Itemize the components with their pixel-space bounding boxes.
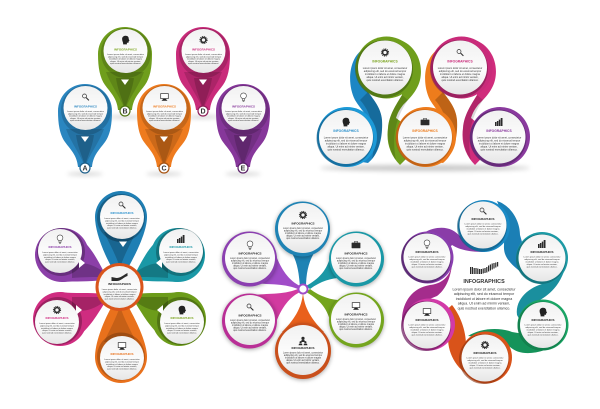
circle: pink: INFOGRAPHICS (447, 60, 473, 64)
circle: orange (396, 107, 456, 167)
pin C: Lorem ipsum dolor sit amet, consectetur (146, 110, 183, 113)
circle: orange: quis nostrud exercitation ullamco. (406, 148, 444, 152)
circle: lower right: adipiscing elit, sed do eiusmod tempor (337, 320, 375, 324)
circle: top: Lorem ipsum dolor sit amet, consectetur (465, 222, 502, 226)
circle: pink: quis nostrud exercitation ullamco. (42, 332, 72, 335)
circle: green (355, 36, 418, 98)
pin E: E (241, 166, 246, 173)
circle: upper left: incididunt ut labore et dolore magna (232, 262, 269, 265)
circle: purple: adipiscing elit, sed do eiusmod tempor (43, 253, 77, 256)
circle: lower left: INFOGRAPHICS (415, 318, 439, 322)
circle: upper right: quis nostrud exercitation ullamco. (527, 266, 558, 268)
circle: top: aliqua. Ut enim ad minim veniam, (468, 230, 499, 233)
circle: pink: incididunt ut labore et dolore magna (41, 327, 74, 330)
circle: lower right: Lorem ipsum dolor sit amet, consectetur (525, 324, 562, 326)
circle: teal: INFOGRAPHICS (169, 245, 193, 249)
circle: green: Lorem ipsum dolor sit amet, consectetur (164, 322, 200, 325)
stems (255, 250, 345, 332)
pin C (137, 84, 191, 174)
circle: lower right: INFOGRAPHICS (344, 312, 368, 316)
pin D: aliqua. Ut enim ad minim veniam, (188, 60, 219, 63)
pin A: quis nostrud exercitation ullamco. (70, 119, 101, 122)
circle: top: INFOGRAPHICS (471, 217, 495, 221)
circle: blue top: incididunt ut labore et dolore magna (106, 222, 139, 225)
circle: bottom: Lorem ipsum dolor sit amet, consectetur (467, 356, 504, 360)
circle: blue: aliqua. Ut enim ad minim veniam, (328, 146, 365, 148)
pin C: aliqua. Ut enim ad minim veniam, (149, 117, 180, 120)
circle: blue top (97, 194, 145, 247)
circle: upper right: aliqua. Ut enim ad minim veniam, (339, 264, 373, 268)
hub: quis nostrud exercitation ullamco. (105, 298, 135, 301)
circle: lower left: incididunt ut labore et dolore magna (232, 324, 269, 327)
pin A: A (82, 166, 88, 173)
pin A: Lorem ipsum dolor sit amet, consectetur (67, 110, 104, 113)
circle: top: adipiscing elit, sed do eiusmod tempor (465, 225, 501, 228)
pin E: adipiscing elit, sed do eiusmod tempor (226, 112, 261, 115)
pin D: adipiscing elit, sed do eiusmod tempor (186, 55, 221, 58)
circle: green: Lorem ipsum dolor sit amet, consectetur (363, 67, 407, 70)
circle: top: quis nostrud exercitation ullamco. (286, 237, 320, 240)
hub: incididunt ut labore et dolore magna (104, 293, 136, 296)
circle: blue top: quis nostrud exercitation ullamco. (107, 227, 137, 230)
center text: aliqua. Ut enim ad minim veniam, (458, 302, 510, 306)
pin B: aliqua. Ut enim ad minim veniam, (110, 60, 141, 63)
pin E: INFOGRAPHICS (232, 104, 255, 108)
circle: lower right: quis nostrud exercitation ullamco. (528, 334, 559, 336)
circle: purple: incididunt ut labore et dolore magna (44, 256, 77, 259)
circle: teal: quis nostrud exercitation ullamco. (166, 261, 196, 264)
pin E: incididunt ut labore et dolore magna (227, 115, 261, 118)
circle: orange bottom: aliqua. Ut enim ad minim veniam, (107, 365, 137, 368)
circle: blue (316, 107, 377, 167)
circle: teal: Lorem ipsum dolor sit amet, consectetur (163, 251, 199, 254)
circle: upper left: INFOGRAPHICS (415, 250, 439, 254)
circle: upper right: adipiscing elit, sed do eiusmod tempor (524, 258, 560, 261)
ground shadow (320, 165, 530, 171)
circle: purple: quis nostrud exercitation ullamco. (480, 148, 518, 152)
circle: upper left: INFOGRAPHICS (238, 252, 262, 256)
circle: pink: Lorem ipsum dolor sit amet, consectetur (39, 322, 75, 325)
circle: upper right: aliqua. Ut enim ad minim veniam, (527, 263, 558, 266)
pin B (98, 27, 152, 117)
circle: lower right: aliqua. Ut enim ad minim veniam, (528, 331, 559, 334)
circle: orange bottom: INFOGRAPHICS (110, 352, 134, 356)
circle: top: incididunt ut labore et dolore magna (466, 228, 500, 230)
circle: upper left: Lorem ipsum dolor sit amet, consectetur (409, 256, 446, 258)
circle: blue: adipiscing elit, sed do eiusmod tempor (325, 140, 367, 142)
circle: top (457, 200, 510, 252)
hub: adipiscing elit, sed do eiusmod tempor (102, 290, 137, 293)
circle: blue: INFOGRAPHICS (333, 129, 359, 133)
pin B: Lorem ipsum dolor sit amet, consectetur (107, 53, 144, 56)
circle: purple (470, 107, 530, 167)
circle: lower left: quis nostrud exercitation ullamco. (233, 329, 267, 332)
circle: lower right: incididunt ut labore et dolore magna (338, 323, 375, 326)
circle: lower left: INFOGRAPHICS (238, 314, 262, 318)
circle: upper left: aliqua. Ut enim ad minim veniam, (412, 263, 443, 266)
circle: bottom: quis nostrud exercitation ullamco. (286, 362, 320, 364)
hub: aliqua. Ut enim ad minim veniam, (105, 295, 135, 298)
circle: green: INFOGRAPHICS (372, 60, 398, 64)
circle: upper left (222, 232, 277, 286)
circle: bottom: adipiscing elit, sed do eiusmod tempor (467, 359, 503, 362)
circle: bottom: INFOGRAPHICS (473, 351, 497, 355)
circle: blue top: INFOGRAPHICS (110, 211, 134, 215)
circle: orange: incididunt ut labore et dolore magna (405, 142, 445, 146)
circle: bottom: quis nostrud exercitation ullamco. (470, 366, 501, 370)
circle: purple: Lorem ipsum dolor sit amet, consectetur (477, 136, 521, 140)
pin A: adipiscing elit, sed do eiusmod tempor (68, 112, 103, 115)
pin C: INFOGRAPHICS (153, 104, 176, 108)
panel: six-petal flower with hub (33, 191, 206, 383)
circle: lower right: aliqua. Ut enim ad minim veniam, (339, 326, 373, 328)
circle: lower left: aliqua. Ut enim ad minim veniam, (233, 326, 267, 330)
pin E (216, 84, 270, 174)
circle: lower left (222, 294, 277, 348)
circle: lower left: Lorem ipsum dolor sit amet, consectetur (409, 324, 446, 326)
circle: upper right: quis nostrud exercitation ullamco. (339, 267, 373, 270)
pin E: quis nostrud exercitation ullamco. (228, 119, 259, 122)
pin A: incididunt ut labore et dolore magna (69, 115, 103, 118)
hub node (298, 284, 308, 294)
circle: pink (430, 36, 492, 98)
center heading: INFOGRAPHICS (463, 279, 505, 285)
pin A: aliqua. Ut enim ad minim veniam, (70, 117, 101, 120)
pin A: INFOGRAPHICS (74, 104, 97, 108)
circle: bottom: INFOGRAPHICS (291, 346, 315, 350)
center text: quis nostrud exercitation ullamco. (458, 306, 510, 310)
ribbons (402, 201, 567, 378)
circle: green: incididunt ut labore et dolore magna (166, 327, 199, 330)
circle: upper left: adipiscing elit, sed do eiusmod tempor (409, 258, 445, 261)
circle: teal: incididunt ut labore et dolore magna (165, 256, 198, 259)
circle: top (275, 202, 330, 256)
circle: upper right: INFOGRAPHICS (344, 252, 368, 256)
petals (33, 191, 206, 383)
circle: blue top: Lorem ipsum dolor sit amet, consectetur (104, 217, 140, 220)
circle: upper left: aliqua. Ut enim ad minim veniam, (233, 264, 267, 268)
circle: lower left: Lorem ipsum dolor sit amet, consectetur (230, 319, 270, 322)
circle: green: quis nostrud exercitation ullamco. (167, 332, 197, 335)
circle: pink: incididunt ut labore et dolore magna (440, 73, 480, 76)
circle: bottom: adipiscing elit, sed do eiusmod tempor (284, 354, 322, 357)
pin C: adipiscing elit, sed do eiusmod tempor (147, 112, 182, 115)
circle: orange bottom: Lorem ipsum dolor sit amet, consectetur (104, 358, 140, 361)
ribbons (350, 40, 499, 165)
pin C: quis nostrud exercitation ullamco. (149, 119, 180, 122)
panel: six teardrops on thin stems (222, 202, 384, 379)
pin D: INFOGRAPHICS (192, 48, 215, 52)
pin D (176, 27, 230, 117)
pin B: B (122, 109, 128, 116)
circle: blue: incididunt ut labore et dolore magna (326, 142, 366, 146)
circle: teal: adipiscing elit, sed do eiusmod tempor (164, 253, 198, 256)
circle: green: adipiscing elit, sed do eiusmod tempor (364, 70, 406, 73)
circle: purple: quis nostrud exercitation ullamco. (45, 261, 75, 264)
center text: adipiscing elit, sed do eiusmod tempor (454, 292, 515, 296)
circle: orange: Lorem ipsum dolor sit amet, consectetur (403, 136, 447, 140)
circle: lower left: adipiscing elit, sed do eiusmod tempor (409, 326, 445, 329)
circle: pink (34, 297, 82, 345)
pin B: INFOGRAPHICS (114, 48, 137, 52)
circle: green (157, 297, 205, 345)
circle: top: adipiscing elit, sed do eiusmod tempor (284, 230, 322, 232)
circle: purple: Lorem ipsum dolor sit amet, consectetur (42, 251, 78, 254)
circle: blue: Lorem ipsum dolor sit amet, consectetur (324, 136, 368, 140)
circle: lower left: adipiscing elit, sed do eiusmod tempor (231, 322, 269, 324)
circle: green: INFOGRAPHICS (170, 316, 194, 320)
circle: orange: adipiscing elit, sed do eiusmod tempor (404, 140, 446, 142)
circle: pink: INFOGRAPHICS (45, 316, 69, 320)
pin C: incididunt ut labore et dolore magna (148, 115, 182, 118)
circle: green: aliqua. Ut enim ad minim veniam, (367, 76, 404, 79)
circle: bottom: Lorem ipsum dolor sit amet, consectetur (283, 352, 323, 354)
circle: purple: aliqua. Ut enim ad minim veniam, (45, 258, 75, 261)
circle: pink: adipiscing elit, sed do eiusmod tempor (40, 324, 74, 327)
circle: upper left: adipiscing elit, sed do eiusmod tempor (231, 260, 269, 262)
circle: lower right: INFOGRAPHICS (531, 318, 555, 322)
circle: orange: aliqua. Ut enim ad minim veniam, (407, 146, 444, 148)
circle: purple: INFOGRAPHICS (48, 245, 72, 249)
pin B: quis nostrud exercitation ullamco. (110, 62, 141, 65)
circle: lower right: incididunt ut labore et dolore magna (526, 328, 560, 332)
circle: green: incididunt ut labore et dolore magna (365, 73, 405, 76)
center text: Lorem ipsum dolor sit amet, consectetur (452, 288, 516, 292)
circle: blue: quis nostrud exercitation ullamco. (327, 148, 365, 152)
hub: Lorem ipsum dolor sit amet, consectetur (102, 288, 138, 291)
circle: blue top: adipiscing elit, sed do eiusmod tempor (105, 219, 139, 222)
circle: top: INFOGRAPHICS (291, 222, 315, 226)
circle: orange bottom: quis nostrud exercitation ullamco. (107, 368, 137, 371)
circle: top: aliqua. Ut enim ad minim veniam, (286, 234, 320, 238)
pin D: Lorem ipsum dolor sit amet, consectetur (185, 53, 222, 56)
circle: pink: quis nostrud exercitation ullamco. (441, 79, 479, 82)
circle: lower right: Lorem ipsum dolor sit amet, consectetur (336, 318, 376, 321)
circle: bottom: incididunt ut labore et dolore magna (285, 356, 322, 360)
circle: upper left: Lorem ipsum dolor sit amet, consectetur (230, 257, 270, 260)
pin E: Lorem ipsum dolor sit amet, consectetur (225, 110, 262, 113)
circle: teal (156, 228, 204, 276)
pin D: quis nostrud exercitation ullamco. (188, 62, 219, 65)
circle: upper left: quis nostrud exercitation ullamco. (412, 266, 443, 268)
circle: blue top: aliqua. Ut enim ad minim veniam, (107, 224, 137, 227)
circle: lower left (401, 298, 455, 351)
circle: top: incididunt ut labore et dolore magna (285, 232, 322, 235)
pin B: incididunt ut labore et dolore magna (109, 58, 143, 61)
pin D: incididunt ut labore et dolore magna (187, 58, 221, 61)
circle: bottom (275, 323, 331, 379)
circle: top: quis nostrud exercitation ullamco. (468, 232, 499, 236)
hub (96, 263, 144, 311)
circle: pink: aliqua. Ut enim ad minim veniam, (42, 329, 72, 332)
circle: bottom: aliqua. Ut enim ad minim veniam, (286, 359, 320, 362)
pin B: adipiscing elit, sed do eiusmod tempor (108, 55, 143, 58)
circle: purple: aliqua. Ut enim ad minim veniam, (481, 146, 518, 148)
circle: upper right: Lorem ipsum dolor sit amet, consectetur (524, 256, 561, 258)
icon: rising chart (112, 273, 128, 281)
circle: purple: incididunt ut labore et dolore magna (479, 142, 519, 146)
circle: bottom: incididunt ut labore et dolore magna (468, 362, 502, 364)
pin C: C (161, 166, 167, 173)
circle: pink: adipiscing elit, sed do eiusmod tempor (439, 70, 481, 73)
circle: green: adipiscing elit, sed do eiusmod tempor (165, 324, 199, 327)
circle: purple: INFOGRAPHICS (486, 129, 512, 133)
circle: upper left: quis nostrud exercitation ullamco. (233, 267, 267, 270)
pin A (58, 84, 112, 174)
panel: ribbon ring with central text (401, 200, 568, 384)
circle: lower right (518, 300, 568, 350)
circle: upper right (329, 232, 384, 286)
circle: pink: Lorem ipsum dolor sit amet, consectetur (438, 67, 482, 70)
circle: orange: INFOGRAPHICS (412, 129, 438, 133)
circle: purple (37, 228, 85, 276)
circle: upper right: Lorem ipsum dolor sit amet, consectetur (336, 257, 376, 260)
circle: bottom (459, 332, 512, 384)
circle: pink: aliqua. Ut enim ad minim veniam, (442, 76, 479, 79)
circle: orange bottom: adipiscing elit, sed do eiusmod tempor (105, 360, 139, 363)
circle: lower left: quis nostrud exercitation ullamco. (412, 334, 443, 336)
ground shadows (67, 116, 261, 176)
circle: green: aliqua. Ut enim ad minim veniam, (167, 329, 197, 332)
circle: teal: aliqua. Ut enim ad minim veniam, (166, 258, 196, 261)
hub: INFOGRAPHICS (108, 282, 131, 286)
circle: orange bottom (97, 332, 145, 380)
panel: linked S-curve circles (316, 36, 530, 171)
circle: top: Lorem ipsum dolor sit amet, consectetur (283, 227, 323, 230)
circle: lower right: quis nostrud exercitation ullamco. (339, 328, 373, 331)
center icon: rising bars (470, 262, 498, 274)
panel: lettered location pins (58, 27, 270, 176)
circle: lower left: incididunt ut labore et dolore magna (410, 328, 444, 332)
pin E: aliqua. Ut enim ad minim veniam, (228, 117, 259, 120)
circle: bottom: aliqua. Ut enim ad minim veniam, (470, 364, 501, 367)
pin D: D (200, 109, 206, 116)
circle: lower right: adipiscing elit, sed do eiusmod tempor (525, 326, 561, 329)
circle: upper right: incididunt ut labore et dolore magna (525, 260, 559, 264)
circle: upper right (516, 232, 568, 284)
circle: lower right (329, 292, 384, 348)
circle: lower left: aliqua. Ut enim ad minim veniam, (412, 331, 443, 334)
center text: incididunt ut labore et dolore magna (456, 297, 512, 301)
circle: upper left: incididunt ut labore et dolore magna (410, 260, 444, 264)
circle: orange bottom: incididunt ut labore et dolore magna (106, 363, 139, 366)
circle: green: quis nostrud exercitation ullamco. (366, 79, 404, 82)
circle: upper right: incididunt ut labore et dolore magna (338, 262, 375, 265)
circle: upper right: INFOGRAPHICS (530, 250, 554, 254)
circle: upper left (401, 232, 454, 284)
circle: upper right: adipiscing elit, sed do eiusmod tempor (337, 260, 375, 262)
circle: purple: adipiscing elit, sed do eiusmod tempor (478, 140, 520, 142)
